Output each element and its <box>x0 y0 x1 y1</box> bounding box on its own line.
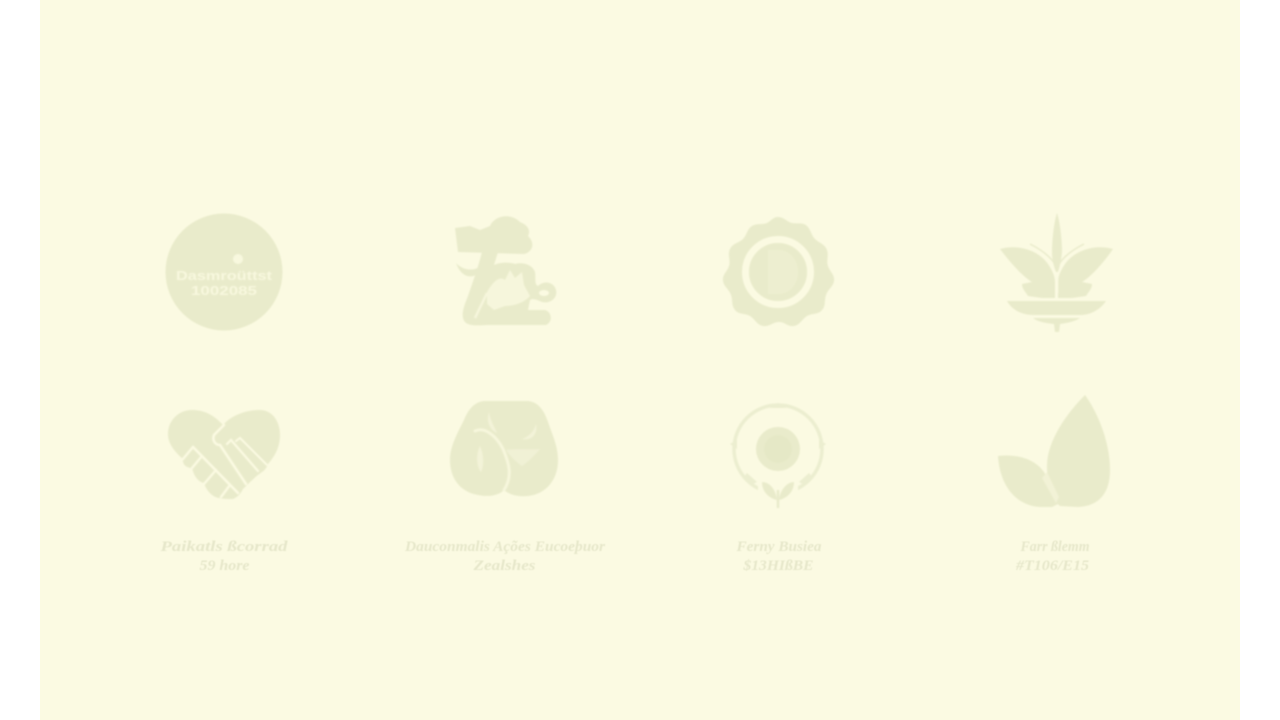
caption: column 3: $13HIßBE <box>742 558 814 574</box>
caption: column 1: Paikatls ßcorrad <box>160 539 288 555</box>
icon: two leaves <box>998 395 1110 507</box>
icon: circular badge with text: Dasmroüttst <box>176 268 273 283</box>
caption: column 2: Zealshes <box>472 558 536 574</box>
icon: circular badge with text: 1002085 <box>191 283 257 298</box>
caption: column 1 <box>160 539 288 574</box>
icon: leaf globe <box>450 401 558 496</box>
caption: column 3 <box>735 539 822 574</box>
caption: column 2 <box>404 539 605 574</box>
caption: column 4 <box>1015 539 1090 574</box>
caption: column 2: Dauconmalis Ações Eucoeþuor <box>404 539 605 555</box>
icon: ring with sprout <box>730 403 826 508</box>
icon: tree and hand <box>455 216 556 325</box>
icon: sprouting plant in bowl <box>1000 213 1113 332</box>
icon: heart handshake <box>168 410 280 499</box>
icon: circular badge with text <box>166 214 282 330</box>
caption: column 4: #T106/E15 <box>1015 558 1090 574</box>
caption: column 3: Ferny Busiea <box>735 539 822 555</box>
icon: gear with ring and letter <box>723 217 834 326</box>
caption: column 4: Farr ßlemm <box>1020 539 1090 555</box>
caption: column 1: 59 hore <box>200 558 250 574</box>
